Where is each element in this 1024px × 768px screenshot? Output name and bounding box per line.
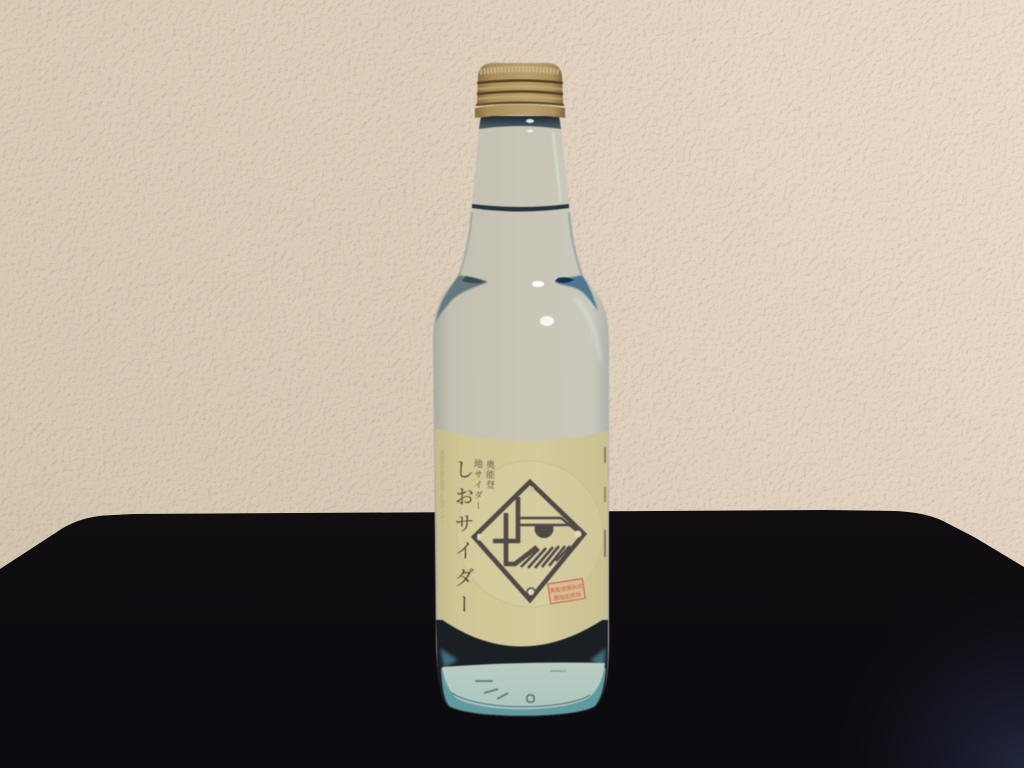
product name: しおサイダー bbox=[451, 459, 473, 621]
liquid level line bbox=[472, 204, 569, 212]
embossed marks on the base bbox=[475, 671, 566, 702]
neck dark band bbox=[479, 116, 561, 129]
base of bottle with liquid bbox=[436, 620, 608, 716]
logo: diamond mark bbox=[474, 482, 584, 600]
black table bbox=[0, 510, 1024, 768]
red stamp bbox=[548, 579, 585, 604]
sub title: 奥能登 bbox=[485, 459, 495, 490]
glass body bbox=[433, 118, 609, 716]
red stamp: 製塩法使用 bbox=[553, 590, 582, 602]
shoulder shadows and highlights bbox=[436, 119, 600, 366]
paper label bbox=[435, 428, 608, 646]
red stamp: 奥能登揚浜式 bbox=[549, 582, 583, 595]
paper label: 地サイダー bbox=[473, 458, 483, 512]
gold cap bbox=[475, 63, 565, 118]
side text on label: 奥能登の塩を使用した地サイダー bbox=[438, 449, 444, 525]
bottle bbox=[433, 63, 609, 716]
